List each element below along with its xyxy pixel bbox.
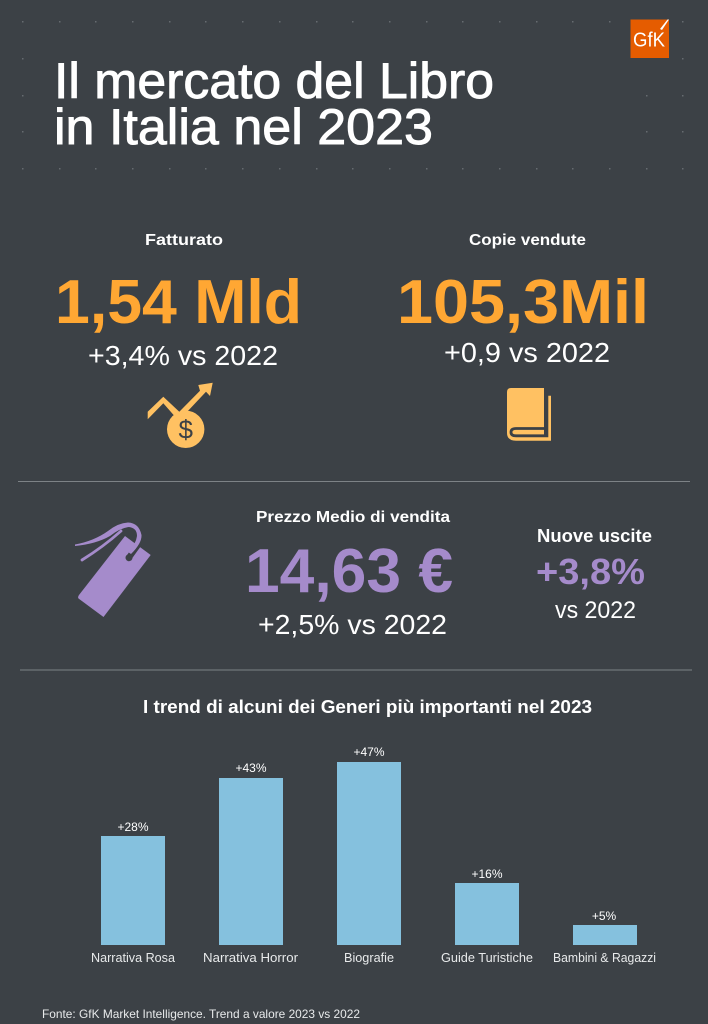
- bar chart: trend generi: [91, 745, 656, 965]
- heading: trend generi: I trend di alcuni dei Generi più importanti nel 2023: [143, 697, 592, 717]
- icon: money growth arrow: $: [178, 414, 193, 444]
- bar: Narrativa Horror: Narrativa Horror: [203, 951, 298, 965]
- logo: GfK: GfK: [633, 30, 666, 52]
- title: Il mercato del Libro: [54, 53, 494, 109]
- source note: Fonte: GfK Market Intelligence. Trend a valore 2023 vs 2022: [42, 1007, 360, 1021]
- title: [54, 53, 494, 155]
- heading: prezzo medio: Prezzo Medio di vendita: [256, 509, 450, 526]
- value: prezzo medio: 14,63 €: [245, 537, 453, 606]
- bar: Narrativa Rosa: +28%: [117, 820, 149, 834]
- heading: fatturato: Fatturato: [145, 232, 223, 249]
- icon: book: [507, 388, 551, 441]
- trend: prezzo medio: +2,5% vs 2022: [258, 609, 447, 640]
- bar: Bambini & Ragazzi: +5%: [592, 909, 617, 923]
- title: in Italia nel 2023: [54, 99, 433, 155]
- divider: [18, 481, 690, 482]
- trend: fatturato: +3,4% vs 2022: [88, 340, 278, 371]
- panel: nuove uscite: [536, 526, 652, 624]
- panel: copie vendute: [397, 232, 649, 441]
- value: nuove uscite: +3,8%: [536, 551, 645, 592]
- heading: nuove uscite: Nuove uscite: [537, 526, 652, 546]
- bar: Guide Turistiche: Guide Turistiche: [441, 951, 533, 965]
- logo: GfK: [630, 20, 669, 58]
- bar: Narrativa Horror: [203, 761, 298, 965]
- bar: Narrativa Rosa: [91, 820, 175, 965]
- icon: money growth arrow: [148, 383, 213, 448]
- trend: nuove uscite: vs 2022: [555, 597, 636, 624]
- heading: copie vendute: Copie vendute: [469, 232, 586, 249]
- bar: Biografie: +47%: [353, 745, 385, 759]
- panel: prezzo medio: [75, 509, 453, 640]
- icon: price tag: [75, 522, 151, 617]
- value: copie vendute: 105,3Mil: [397, 268, 649, 337]
- bar: Bambini & Ragazzi: [553, 909, 656, 965]
- bar: Narrativa Horror: +43%: [235, 761, 267, 775]
- bar: Guide Turistiche: +16%: [471, 867, 503, 881]
- bar: Guide Turistiche: [441, 867, 533, 965]
- panel: fatturato: [55, 232, 302, 448]
- bar: Bambini & Ragazzi: Bambini & Ragazzi: [553, 951, 656, 965]
- bar: Narrativa Rosa: Narrativa Rosa: [91, 951, 175, 965]
- bar: Biografie: Biografie: [344, 951, 394, 965]
- trend: copie vendute: +0,9 vs 2022: [444, 337, 610, 368]
- bar: Biografie: [337, 745, 401, 965]
- divider: [20, 670, 692, 671]
- value: fatturato: 1,54 Mld: [55, 268, 302, 337]
